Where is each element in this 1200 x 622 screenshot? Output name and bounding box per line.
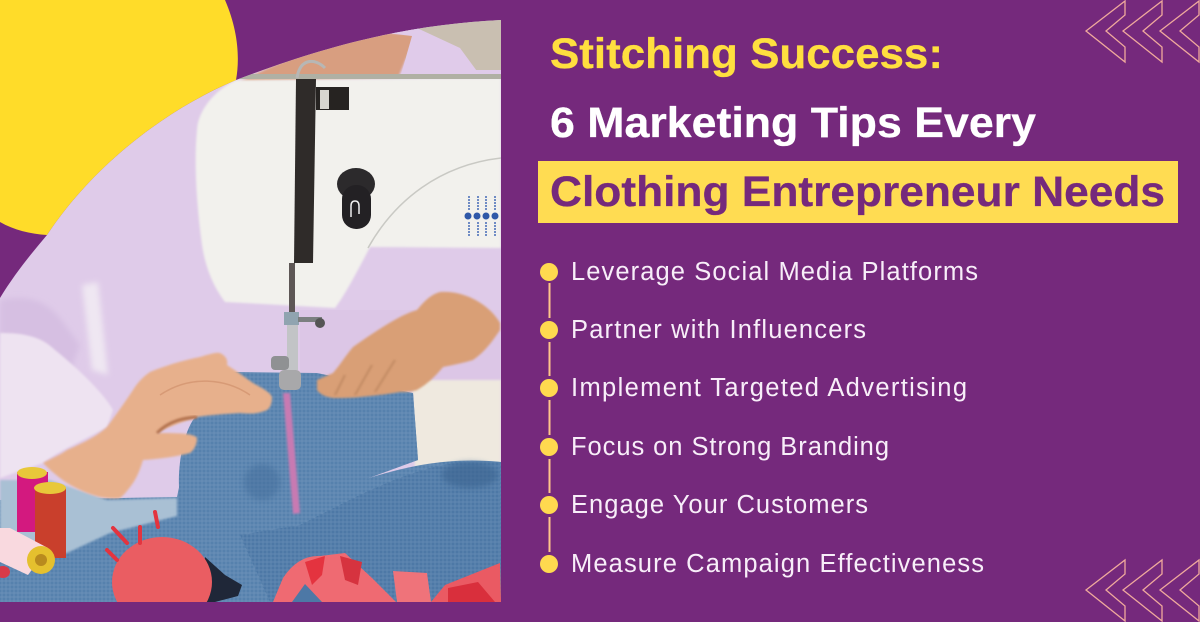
stitch chart xyxy=(464,196,498,236)
photo: sewing machine and hands xyxy=(0,20,501,622)
title line 1: Stitching Success: xyxy=(550,30,943,78)
yellow corner blob xyxy=(0,0,238,235)
list of tips xyxy=(540,258,984,578)
machine base xyxy=(412,380,501,470)
presser foot xyxy=(271,312,325,390)
tip 4: Focus on Strong Branding xyxy=(571,433,889,461)
sweater xyxy=(0,20,501,500)
title highlight: Clothing Entrepreneur Needs xyxy=(550,168,1165,216)
tip 2: Partner with Influencers xyxy=(571,316,866,344)
tip 5: Engage Your Customers xyxy=(571,491,868,519)
hand left xyxy=(43,353,272,498)
pin cushion xyxy=(104,510,242,602)
tip 6: Measure Campaign Effectiveness xyxy=(571,550,984,578)
tip 1: Leverage Social Media Platforms xyxy=(571,258,978,286)
thread spools xyxy=(0,467,66,578)
chevrons top right xyxy=(1086,1,1199,62)
machine knob xyxy=(337,168,375,229)
tip 3: Implement Targeted Advertising xyxy=(571,374,967,402)
chevrons bottom right xyxy=(1086,560,1199,621)
measuring tape xyxy=(273,553,501,602)
denim fabric xyxy=(0,372,501,602)
hand right xyxy=(317,292,500,398)
sewing machine body xyxy=(196,61,501,313)
timeline connectors xyxy=(548,283,550,552)
title line 2: 6 Marketing Tips Every xyxy=(550,99,1036,147)
